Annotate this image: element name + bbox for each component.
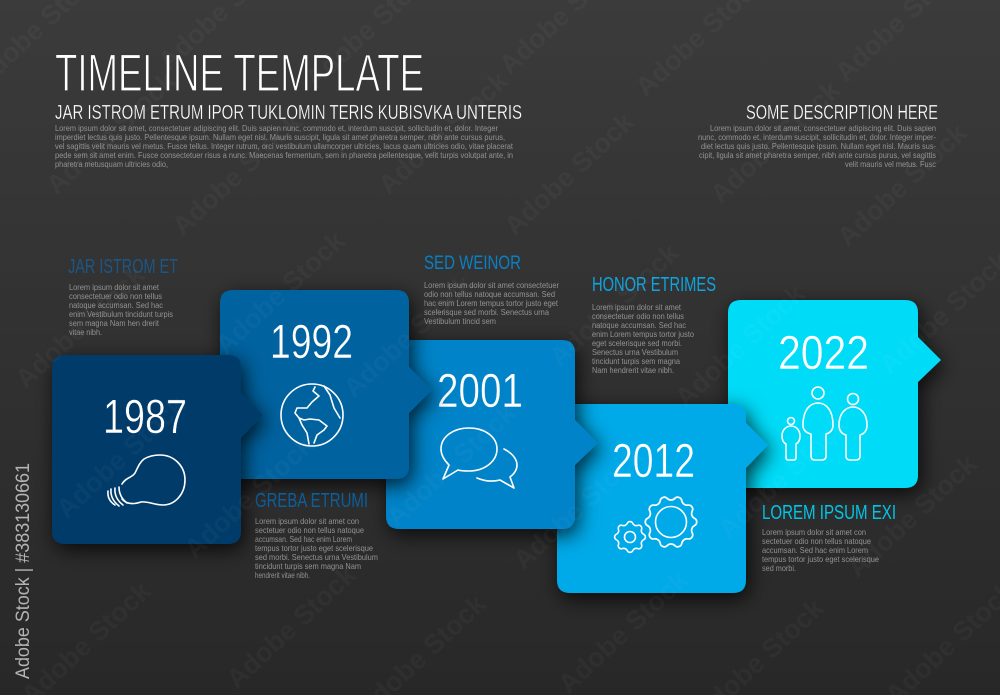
step 4 text: Senectus urna Vestibulum: [592, 347, 678, 357]
step 1 text: natoque accumsan. Sed hac: [69, 300, 164, 310]
step 3 text: Vestibulum tincid sem: [424, 316, 496, 326]
description text: [698, 123, 937, 169]
step 4 text: Lorem ipsum dolor sit amet: [592, 302, 682, 312]
step 1 text: vitae nibh.: [69, 327, 102, 337]
intro text: vel sagittis velit mauris vel metus. Fusce tellus. Integer rutrum, orci vestibulum ullamcorper ultricies, lacus quam ultricies odio, vitae placerat: [55, 141, 514, 151]
step 4 text: enim Lorem tempus tortor justo: [592, 329, 694, 339]
card 2022: [728, 300, 941, 488]
step 5 text: tempus tortor justo eget scelerisque: [762, 554, 879, 564]
step 5 heading: LOREM IPSUM EXI: [762, 502, 896, 524]
step 3 text: Lorem ipsum dolor sit amet consectetuer: [424, 280, 559, 290]
intro text: pede sem sit amet enim. Fusce consectetuer risus a nunc. Maecenas fermentum, sem in pharetra pellentesque, velit turpis volutpat ante, in: [55, 150, 513, 160]
step 2 text: tempus tortor justo eget scelerisque: [255, 543, 373, 553]
intro text: imperdiet lectus quis justo. Pellentesque ipsum. Nullam eget nisl. Mauris suscipit, ligula sit amet pharetra semper, nibh ante cursus purus,: [55, 132, 505, 142]
step 4 text: eget scelerisque sed morbi.: [592, 338, 682, 348]
card 2022: 2022: [778, 327, 869, 380]
description text: Lorem ipsum dolor sit amet, consectetuer adipiscing elit. Duis sapien: [710, 123, 936, 133]
step 1 text: consectetuer odio non tellus: [69, 291, 162, 301]
watermarks: Adobe Stock: [841, 448, 983, 583]
step 2 heading: GREBA ETRUMI: [255, 490, 368, 512]
watermarks: Adobe Stock: [209, 225, 351, 360]
step 3 text: [424, 280, 559, 326]
step 5 text: Lorem ipsum dolor sit amet con: [762, 527, 866, 537]
step 2 text: Lorem ipsum dolor sit amet con: [255, 516, 359, 526]
stock image id: Adobe Stock | #383130661: [13, 463, 34, 679]
step 5 text: [762, 527, 879, 573]
watermarks: Adobe Stock: [40, 65, 182, 200]
step 4 text: [592, 302, 694, 375]
card 1992: [220, 290, 432, 479]
title: TIMELINE TEMPLATE: [55, 44, 424, 103]
watermarks: Adobe Stock: [337, 268, 479, 403]
step 2 text: accumsan. Sed hac enim Lorem: [255, 534, 352, 544]
step 5 text: sed morbi.: [762, 563, 796, 573]
card 2001: [386, 340, 598, 529]
step 2 text: [255, 516, 378, 580]
description text: diet lectus quis justo. Pellentesque ipsum. Nullam eget nisl. Mauris sus-: [701, 141, 936, 151]
watermarks: Adobe Stock: [166, 106, 308, 241]
card 2012: [557, 404, 768, 593]
watermarks: Adobe Stock: [178, 429, 320, 564]
step 3 text: hac enim Lorem tempus tortor justo eget: [424, 298, 559, 308]
description text: nunc, commodo et, interdum suscipit, sollicitudin et, dolor. Integer imper-: [698, 132, 936, 142]
card 2012: 2012: [612, 435, 695, 488]
watermarks: Adobe Stock: [220, 559, 362, 694]
step 3 text: scelerisque sed morbi. Senectus urna: [424, 307, 549, 317]
icon: globe: [281, 384, 343, 446]
watermarks: Adobe Stock: [704, 74, 846, 209]
watermarks: Adobe Stock: [9, 259, 151, 394]
step 2 text: tincidunt turpis sem magna Nam: [255, 561, 361, 571]
description text: cipit, ligula sit amet pharetra semper, nibh ante cursus purus, vel sagittis: [699, 150, 936, 160]
step 4 text: consectetuer odio non tellus: [592, 311, 684, 321]
step 1 heading: JAR ISTROM ET: [68, 256, 178, 278]
step 3 heading: SED WEINOR: [424, 253, 521, 274]
step 4 text: Nam hendrerit vitae nibh.: [592, 365, 674, 375]
card 1987: 1987: [103, 391, 187, 444]
step 4 heading: HONOR ETRIMES: [592, 274, 716, 296]
step 3 text: odio non tellus natoque accumsan. Sed: [424, 289, 555, 299]
card 1987: [52, 355, 263, 544]
watermarks: Adobe Stock: [498, 106, 640, 241]
step 1 text: sem magna Nam hen drerit: [69, 318, 160, 328]
icon: light bulb: [108, 455, 185, 506]
step 2 text: sed morbi. Senectus urna Vestibulum: [255, 552, 378, 562]
watermarks: Adobe Stock: [831, 117, 973, 252]
step 2 text: hendrerit vitae nibh.: [255, 570, 310, 580]
icon: speech bubbles: [441, 428, 517, 488]
intro text: [55, 123, 514, 169]
step 2 text: sectetuer odio non tellus natoque: [255, 525, 364, 535]
step 1 text: [69, 282, 173, 337]
step 1 text: enim Vestibulum tincidunt turpis: [69, 309, 173, 319]
watermarks: Adobe Stock: [507, 440, 649, 575]
card 2001: 2001: [437, 365, 523, 418]
watermarks: Adobe Stock: [712, 409, 854, 544]
step 4 text: tincidunt turpis sem magna: [592, 356, 680, 366]
watermarks: Adobe Stock: [50, 389, 192, 524]
card 1992: 1992: [270, 316, 353, 369]
step 5 text: sectetuer odio non tellus natoque: [762, 536, 871, 546]
step 4 text: natoque accumsan. Sed hac: [592, 320, 687, 330]
step 5 text: accumsan. Sed hac enim Lorem: [762, 545, 868, 555]
watermarks: Adobe Stock: [380, 397, 522, 532]
intro text: pharetra metusquam ultricies odio,: [55, 159, 168, 169]
subtitle: JAR ISTROM ETRUM IPOR TUKLOMIN TERIS KUBISVKA UNTERIS: [55, 102, 522, 124]
watermarks: Adobe Stock: [669, 278, 811, 413]
icon: gears: [615, 497, 697, 552]
watermarks: Adobe Stock: [543, 237, 685, 372]
step 1 text: Lorem ipsum dolor sit amet: [69, 282, 160, 292]
description text: velit mauris vel metus. Fusc: [845, 159, 937, 169]
watermarks: Adobe Stock: [372, 65, 514, 200]
intro text: Lorem ipsum dolor sit amet, consectetuer adipiscing elit. Duis sapien nunc, commodo et, interdum suscipit, sollicitudin et, dolor. Integer: [55, 123, 498, 133]
icon: family: [782, 387, 867, 460]
